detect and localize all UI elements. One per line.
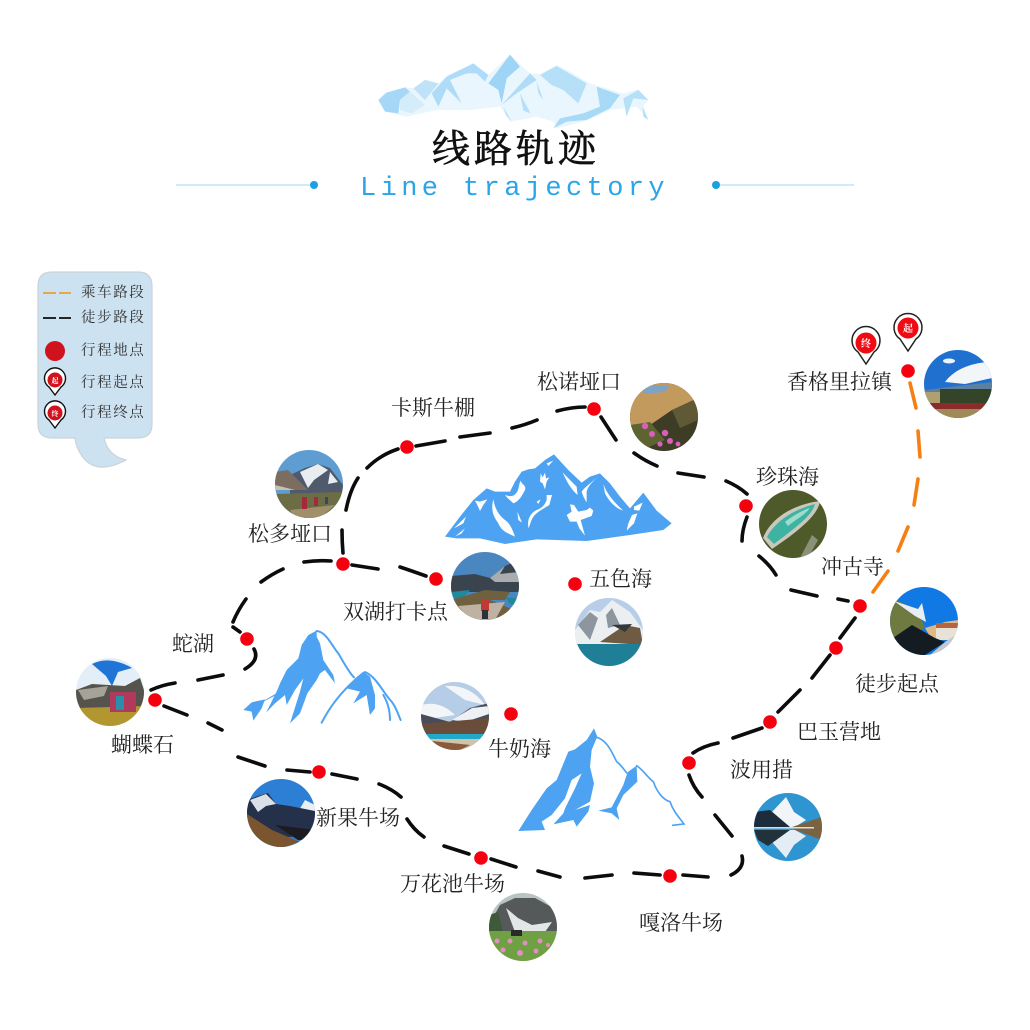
- legend: stop: [45, 341, 145, 361]
- title: 线路轨迹: [432, 118, 600, 173]
- legend: bus route: 乘车路段: [81, 284, 145, 301]
- legend: end: [45, 401, 145, 428]
- walking route: Zhenzhu to start: [742, 517, 848, 601]
- photo: 双湖打卡点: [451, 552, 519, 620]
- walking route: Songnuo to Zhenzhu: [601, 417, 747, 494]
- legend: bus route: [43, 284, 145, 301]
- walking route: lower trail: [164, 706, 743, 878]
- label: 卡斯牛棚: 卡斯牛棚: [391, 396, 475, 420]
- photo: 松多垭口: [275, 450, 343, 518]
- label: 蛇湖: 蛇湖: [172, 632, 214, 656]
- left header divider: [176, 181, 318, 189]
- label: 万花池牛场: 万花池牛场: [400, 872, 505, 896]
- legend: start: 行程起点: [81, 373, 145, 391]
- route stops: [148, 364, 915, 883]
- label: 香格里拉镇: 香格里拉镇: [787, 370, 894, 394]
- mountain: lower right: [518, 728, 684, 831]
- legend panel: [38, 272, 152, 467]
- photo: 五色海: [575, 598, 643, 666]
- legend: start: [45, 368, 145, 395]
- mountain: top centre: [445, 454, 672, 544]
- right header divider: [712, 181, 854, 189]
- legend: walking route: [43, 308, 145, 326]
- mountain: middle left: [235, 631, 401, 725]
- walking route: Boyong to start: [693, 618, 855, 753]
- label: 五色海: 五色海: [589, 567, 652, 591]
- walking route: lake branch: [352, 565, 426, 576]
- label: 波用措: 波用措: [730, 758, 793, 782]
- label: 蝴蝶石: 蝴蝶石: [111, 733, 174, 757]
- photo: 波用措: [754, 793, 822, 861]
- bus route: [873, 383, 920, 592]
- pin: end: [852, 327, 880, 364]
- photo: 蝴蝶石: [76, 658, 144, 726]
- photo: 珍珠海: [759, 490, 827, 558]
- subtitle: Line trajectory: [360, 174, 669, 204]
- photo: 万花池牛场: [489, 893, 557, 961]
- label: 双湖打卡点: 双湖打卡点: [343, 600, 449, 624]
- label: 松多垭口: 松多垭口: [248, 522, 332, 546]
- header mountain illustration: [378, 55, 648, 128]
- legend: end: 终: [52, 409, 58, 419]
- photo: 松诺垭口: [630, 383, 698, 451]
- pin: start: 起: [903, 320, 913, 335]
- label: 巴玉营地: 巴玉营地: [797, 720, 881, 744]
- legend: stop: 行程地点: [81, 341, 145, 359]
- legend: walking route: 徒步路段: [81, 308, 145, 326]
- walking route: upper trail: [151, 407, 585, 690]
- label: 珍珠海: 珍珠海: [756, 465, 819, 489]
- label: 冲古寺: 冲古寺: [821, 555, 884, 579]
- label: 新果牛场: 新果牛场: [316, 806, 400, 830]
- pin: end: 终: [861, 335, 871, 350]
- legend: start: 起: [52, 376, 58, 386]
- photo: 牛奶海: [421, 682, 489, 750]
- photo: 徒步起点: [890, 587, 958, 655]
- label: 牛奶海: 牛奶海: [488, 737, 551, 761]
- photo: 香格里拉镇: [924, 350, 992, 418]
- label: 徒步起点: 徒步起点: [855, 672, 940, 696]
- label: 松诺垭口: 松诺垭口: [537, 370, 621, 394]
- legend: end: 行程终点: [81, 403, 145, 421]
- photo: 新果牛场: [247, 779, 315, 847]
- label: 嘎洛牛场: 嘎洛牛场: [639, 911, 723, 935]
- pin: start: [894, 314, 922, 351]
